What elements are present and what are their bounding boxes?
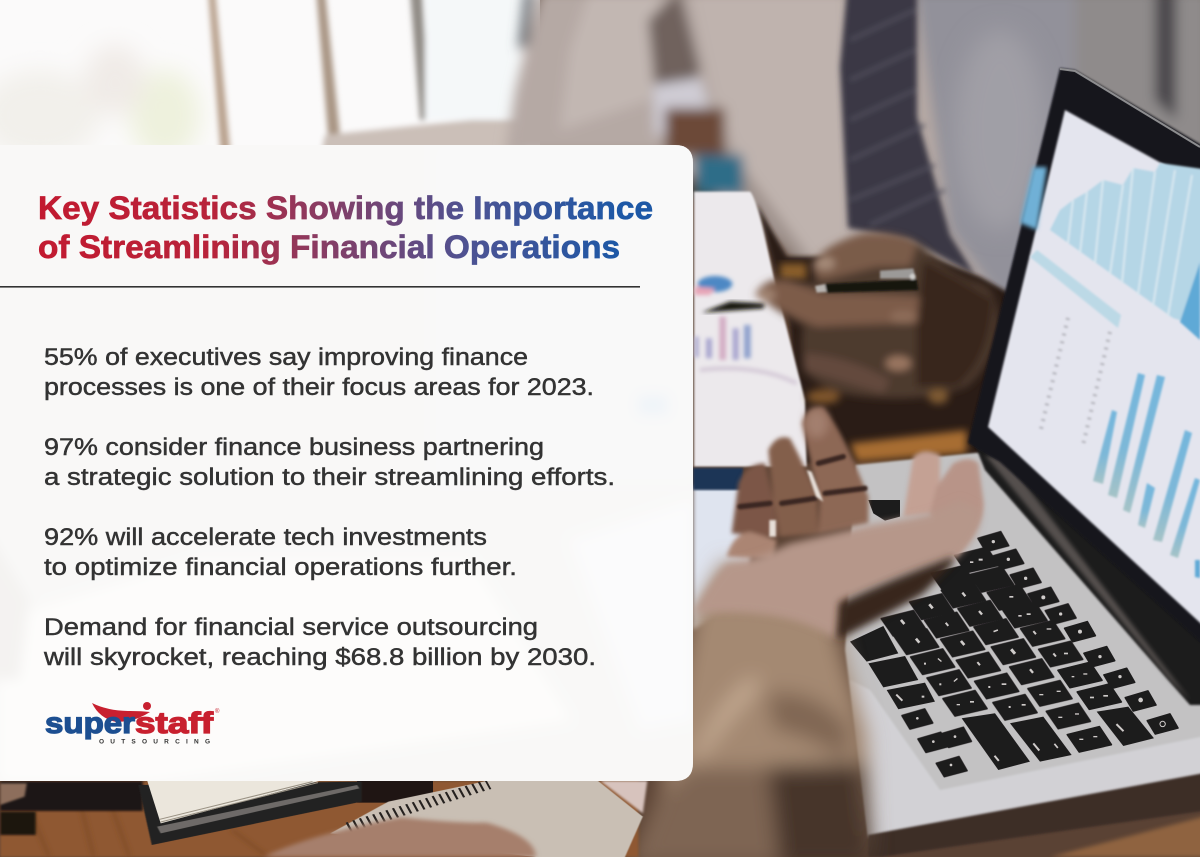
translucent panel xyxy=(0,145,693,781)
document bars xyxy=(695,317,797,383)
pen held in hand xyxy=(815,268,918,293)
palm shadow xyxy=(837,557,953,640)
shirted colleague xyxy=(505,0,1200,300)
logo: SuperStaff Outsourcing: super xyxy=(45,707,135,740)
wood under hand xyxy=(850,430,967,462)
stat: tech investments: 92% will accelerate tech investments xyxy=(44,524,487,551)
stat: outsourcing demand xyxy=(43,614,596,671)
screen table header xyxy=(1030,250,1121,328)
ghosted desk objects under panel xyxy=(0,145,693,781)
laptop screen xyxy=(968,68,1200,650)
stat: finance processes: processes is one of their focus areas for 2023. xyxy=(44,374,594,401)
logo: SuperStaff Outsourcing: OUTSOURCING xyxy=(99,738,210,746)
stat: outsourcing demand: will skyrocket, reaching $68.8 billion by 2030. xyxy=(43,644,596,671)
desk with notebook and lower hand xyxy=(0,781,647,857)
forearm sleeve xyxy=(630,560,872,857)
laptop base xyxy=(845,445,1200,857)
lower hand xyxy=(263,817,536,857)
stat: tech investments: to optimize financial operations further. xyxy=(44,554,517,581)
stat: business partnering: 97% consider finance business partnering xyxy=(44,434,544,461)
knuckle creases xyxy=(740,457,865,507)
pen tip xyxy=(702,302,765,313)
open hand and forearm xyxy=(630,407,984,857)
leather notebook xyxy=(138,782,362,845)
divider xyxy=(0,286,640,288)
title: of Streamlining Financial Operations xyxy=(38,229,620,265)
ring highlights xyxy=(769,470,823,537)
screen bars xyxy=(1093,373,1200,578)
tablet left of open hand xyxy=(693,486,760,630)
screen reflection xyxy=(1020,167,1047,230)
fingers xyxy=(727,407,984,560)
logo: SuperStaff Outsourcing: staff xyxy=(135,707,214,740)
document sheet xyxy=(694,192,807,467)
stat: business partnering xyxy=(44,434,615,491)
palm xyxy=(693,500,980,640)
pie chart xyxy=(695,276,732,295)
writing hand xyxy=(755,233,998,404)
stat: finance processes xyxy=(44,344,594,401)
papers and hand holding pen xyxy=(694,192,1010,467)
stat: tech investments xyxy=(44,524,517,581)
office window backdrop xyxy=(0,0,540,170)
logo: SuperStaff Outsourcing: ® xyxy=(215,708,220,715)
stat: outsourcing demand: Demand for financial service outsourcing xyxy=(44,614,538,641)
screen table columns xyxy=(1040,318,1110,445)
stat: business partnering: a strategic solution to their streamlining efforts. xyxy=(44,464,615,491)
keyboard xyxy=(850,500,1178,777)
necktie xyxy=(840,0,975,275)
title: Key Statistics Showing the Importance xyxy=(38,190,653,226)
logo: SuperStaff Outsourcing xyxy=(45,702,220,746)
spiral notebook xyxy=(330,781,643,857)
stat: finance processes: 55% of executives say improving finance xyxy=(44,344,528,371)
screen area chart xyxy=(1050,163,1200,340)
title xyxy=(38,190,653,265)
